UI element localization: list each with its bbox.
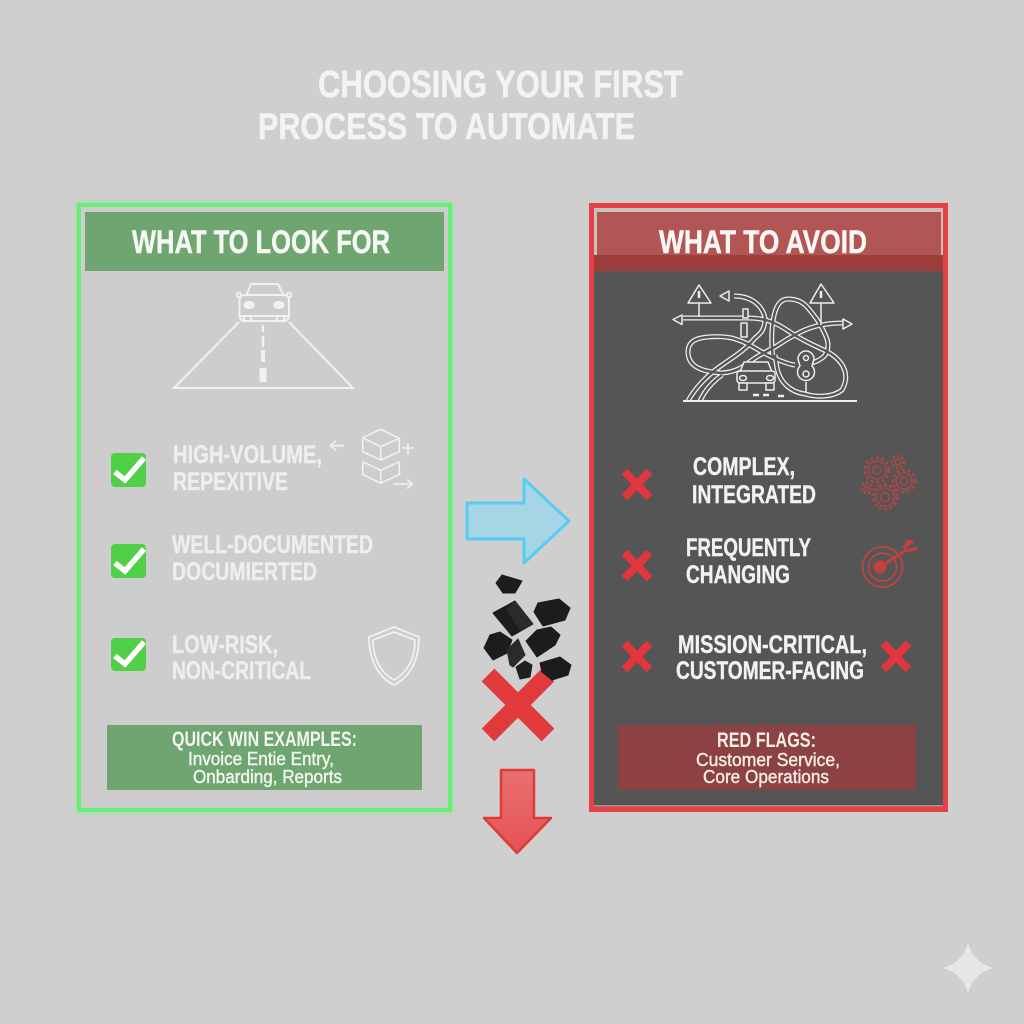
icon: red cross <box>884 644 908 670</box>
icon: sparkle <box>943 943 993 993</box>
icon: target with arrow <box>862 540 917 587</box>
item: mission-critical, customer-facing: CUSTOMER-FACING <box>676 657 864 685</box>
title: CHOOSING YOUR FIRST <box>318 64 683 106</box>
item: low-risk, non-critical: LOW-RISK, <box>172 631 278 659</box>
item: frequently changing <box>624 534 917 589</box>
item: mission-critical, customer-facing <box>624 631 908 685</box>
callout: red flags: RED FLAGS: <box>717 729 816 752</box>
item: high-volume, repetitive <box>111 429 414 496</box>
callout: red flags: Core Operations <box>703 767 829 787</box>
heading: what to avoid: WHAT TO AVOID <box>659 224 867 260</box>
callout: quick win examples: QUICK WIN EXAMPLES: <box>172 728 357 751</box>
title <box>258 64 683 147</box>
item: high-volume, repetitive: REPEXITIVE <box>173 468 288 496</box>
arrow: blue right arrow <box>467 479 569 563</box>
callout: red flags: Customer Service, <box>696 750 840 770</box>
callout: red flags <box>618 725 916 790</box>
arrow: red down arrow <box>484 770 551 853</box>
item: high-volume, repetitive: HIGH-VOLUME, <box>173 441 322 469</box>
item: frequently changing: FREQUENTLY <box>686 534 811 562</box>
title: PROCESS TO AUTOMATE <box>258 106 635 147</box>
panel: what to avoid <box>589 203 948 812</box>
callout: quick win examples: Onbarding, Reports <box>193 767 342 787</box>
item: complex, integrated: INTEGRATED <box>692 481 816 509</box>
callout: quick win examples: Invoice Entie Entry, <box>188 749 334 769</box>
icon: stacked boxes <box>330 429 414 488</box>
heading: what to look for: WHAT TO LOOK FOR <box>132 224 390 260</box>
icon: red cross in centre <box>488 675 548 735</box>
icon: gears <box>862 456 915 509</box>
icon: tangled roads <box>673 284 857 401</box>
icon: car on a straight road <box>174 284 353 388</box>
heading: what to look for <box>85 212 444 271</box>
item: well-documented: WELL-DOCUMENTED <box>172 531 373 559</box>
item: complex, integrated <box>624 453 915 509</box>
item: mission-critical, customer-facing: MISSION-CRITICAL, <box>678 631 867 659</box>
item: complex, integrated: COMPLEX, <box>693 453 795 481</box>
item: low-risk, non-critical: NON-CRITICAL <box>172 657 311 685</box>
icon: falling black blocks <box>484 575 571 680</box>
item: well-documented <box>111 531 373 586</box>
callout: quick win examples <box>107 725 422 790</box>
item: well-documented: DOCUMIERTED <box>172 558 317 586</box>
item: low-risk, non-critical <box>111 627 419 685</box>
panel: what to look for <box>79 205 450 810</box>
heading: what to avoid <box>594 212 943 271</box>
icon: shield <box>369 627 419 685</box>
item: frequently changing: CHANGING <box>686 561 790 589</box>
